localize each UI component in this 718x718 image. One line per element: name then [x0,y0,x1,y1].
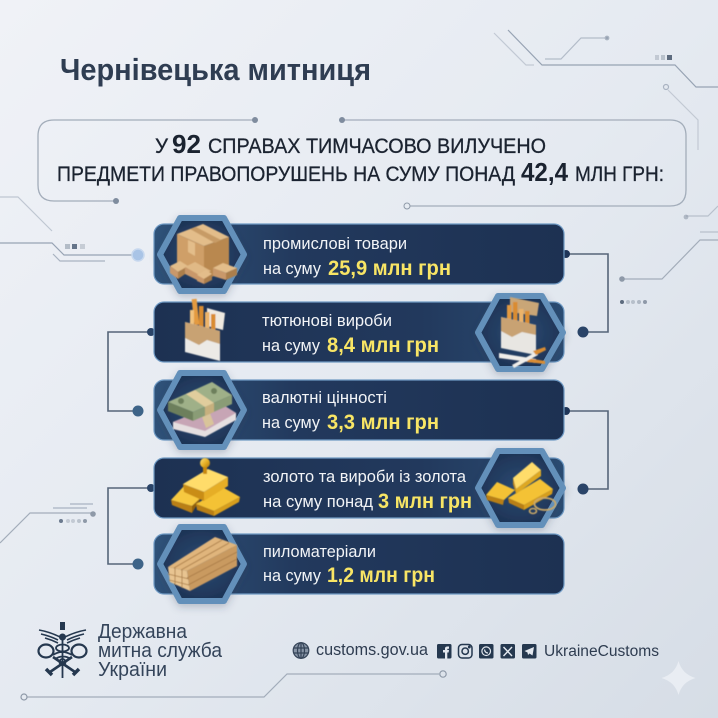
panel: gold and gold products: 3 млн грн [378,489,472,513]
panel: timber [154,527,564,601]
connector: left lower bracket [108,484,155,570]
icon: instagram [458,644,472,658]
connector: right top bracket [562,250,608,338]
logo: state customs service [38,620,223,681]
panel: industrial goods [154,218,564,291]
icon: stacks of money [160,373,244,447]
icon: X [500,644,515,658]
icon: telegram [522,644,536,658]
callout: total summary: 42,4 [521,157,568,187]
panel: industrial goods: 25,9 млн грн [328,256,451,280]
icon: cardboard boxes [160,218,244,291]
connector: right lower bracket [562,407,608,494]
footer: website and social media: customs.gov.ua [316,640,429,659]
logo: state customs service: митна служба [98,639,223,662]
icon: sparkle star [662,661,696,695]
callout: total summary: 92 [172,129,201,159]
icon: whatsapp [479,644,494,658]
callout: total summary [38,117,686,209]
logo: state customs service: України [98,658,167,681]
panel: tobacco products: на суму [262,337,321,355]
panel: currency valuables: валютні цінності [262,389,387,407]
icon: cigarette pack hexagon [478,296,563,369]
callout: total summary: СПРАВАХ ТИМЧАСОВО ВИЛУЧЕНО [208,134,546,158]
footer: website and social media: UkraineCustoms [544,643,659,660]
panel: industrial goods: на суму [263,260,322,278]
callout: total summary: ПРЕДМЕТИ ПРАВОПОРУШЕНЬ НА СУМУ ПОНАД [57,162,515,186]
icon: facebook [437,644,452,658]
panel: gold and gold products [154,451,564,525]
panel: tobacco products: тютюнові вироби [262,312,392,330]
panel: gold and gold products: на суму понад [263,493,373,511]
callout: total summary: МЛН ГРН: [575,162,664,186]
logo: state customs service: Державна [98,620,188,643]
icon: gold bars and rings hexagon [478,451,563,525]
panel: gold and gold products: золото та вироби із золота [263,468,467,486]
connector: left upper bracket [108,328,155,416]
icon: globe [293,643,309,658]
decorative dots [59,55,688,523]
icon: stack of lumber [160,527,244,601]
icon: gold bars on bar [171,458,240,516]
panel: timber: 1,2 млн грн [327,563,435,587]
panel: timber: на суму [263,567,322,585]
icon: customs emblem [38,622,86,678]
callout: total summary: У [155,134,168,158]
panel: industrial goods: промислові товари [263,235,407,253]
footer: website and social media [293,640,659,660]
icon: open cigarette pack on bar [185,299,225,361]
panel: currency valuables: 3,3 млн грн [327,410,439,434]
panel: currency valuables: на суму [262,414,321,432]
panel: tobacco products: 8,4 млн грн [327,333,439,357]
title: Чернівецька митниця [60,53,371,87]
panel: currency valuables [154,373,564,447]
panel: tobacco products [154,296,564,369]
panel: timber: пиломатеріали [263,543,376,561]
